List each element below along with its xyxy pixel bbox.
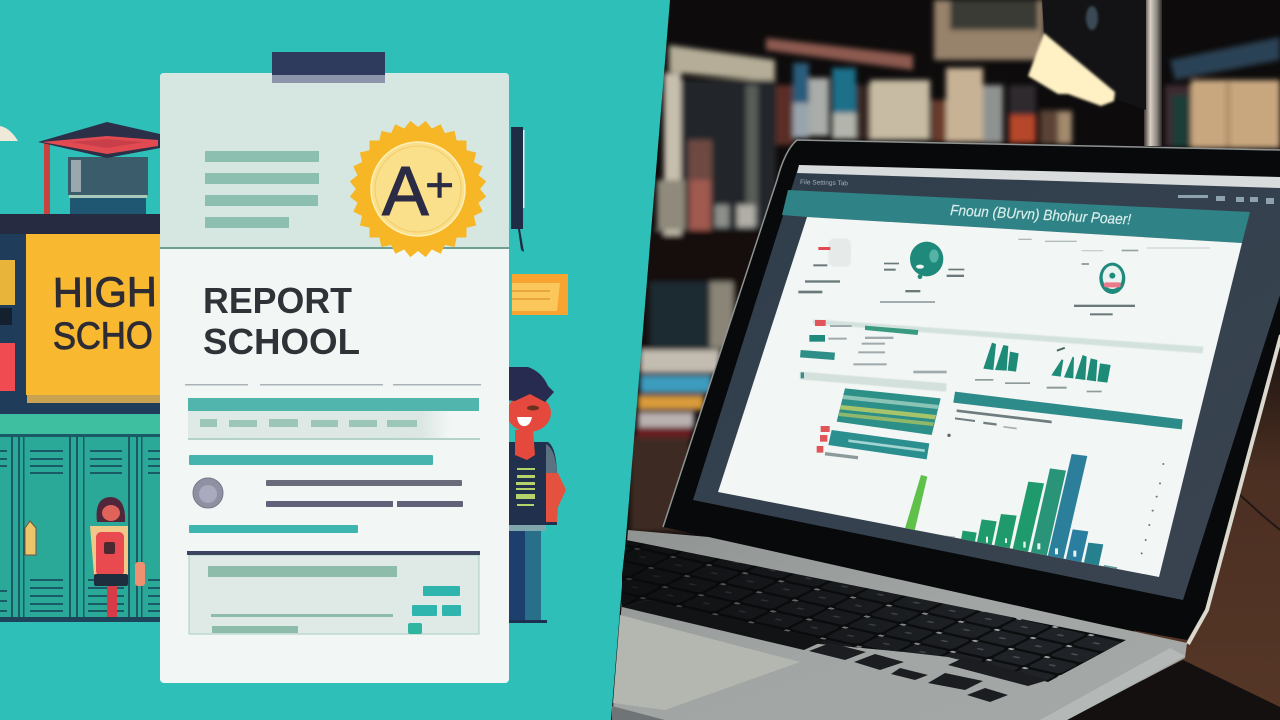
badge grade: A bbox=[382, 152, 429, 230]
report heading: SCHOOL bbox=[203, 321, 360, 362]
dashboard title: Fnoun (BUrvn) Bhohur Poaer! bbox=[950, 202, 1132, 229]
trousers bbox=[505, 531, 541, 621]
teal bar bbox=[189, 455, 433, 465]
trackpad bbox=[613, 615, 800, 710]
boy character behind report bbox=[505, 367, 566, 623]
blurred bookshelf books bbox=[630, 0, 1280, 532]
face bbox=[507, 394, 551, 432]
dashboard contents bbox=[798, 238, 1210, 572]
small bar chart two bbox=[1051, 355, 1111, 383]
badge rosette bbox=[350, 121, 486, 257]
header text lines bbox=[205, 151, 319, 228]
school building illustration bbox=[0, 122, 160, 622]
summary panel bbox=[187, 551, 480, 634]
small red poster bbox=[0, 343, 15, 391]
small yellow poster bbox=[0, 260, 15, 305]
green band bbox=[0, 414, 160, 434]
grey section strip bbox=[800, 372, 947, 392]
profile placeholder bbox=[818, 238, 851, 267]
yellow school sign bbox=[26, 234, 160, 403]
laptop lid bbox=[663, 140, 1280, 640]
locker tag bbox=[25, 521, 36, 555]
A+ badge: + bbox=[425, 157, 454, 213]
stripes bbox=[516, 468, 535, 506]
red markers bbox=[817, 426, 830, 453]
graduation cap bbox=[38, 122, 160, 214]
second mascot icon bbox=[1099, 263, 1125, 294]
clip bbox=[272, 52, 385, 83]
striped data table bbox=[837, 388, 941, 435]
cloud bbox=[0, 126, 18, 141]
A+ badge bbox=[350, 121, 486, 257]
report heading bbox=[203, 280, 360, 362]
legend chips and summary bars bbox=[800, 320, 947, 373]
chart axis dots bbox=[1141, 463, 1164, 554]
main bar chart bbox=[904, 454, 1117, 572]
header icons bbox=[1178, 195, 1274, 204]
wooden table bbox=[1060, 340, 1280, 720]
chart labels bbox=[975, 379, 1102, 392]
student with backpack bbox=[90, 497, 145, 617]
report card bbox=[160, 52, 509, 683]
dashboard screen bbox=[718, 217, 1242, 577]
card header bbox=[160, 73, 509, 248]
laptop bbox=[612, 140, 1280, 720]
small bar chart one bbox=[983, 343, 1065, 372]
subject table bbox=[188, 398, 480, 440]
sticky note bbox=[512, 274, 568, 315]
neck bbox=[515, 430, 535, 460]
main chart header bbox=[953, 392, 1183, 429]
teal callout block bbox=[828, 430, 929, 459]
lockers bbox=[0, 434, 160, 622]
grey divider band bbox=[813, 319, 1203, 353]
roof bbox=[0, 214, 160, 234]
teal background panel bbox=[0, 0, 670, 720]
building wall bbox=[0, 234, 160, 414]
lid edges bbox=[663, 140, 1280, 644]
green mascot icon bbox=[910, 242, 943, 279]
laptop base deck bbox=[612, 530, 1187, 720]
sign text: HIGH bbox=[53, 268, 157, 316]
screen bezel bbox=[693, 165, 1280, 600]
desk lamp bbox=[1028, 0, 1162, 146]
browser top bar bbox=[797, 165, 1280, 188]
browser toolbar text: File Settings Tab bbox=[800, 179, 848, 187]
dashboard header band bbox=[782, 190, 1250, 243]
pen clipped to report bbox=[511, 127, 524, 252]
main chart subtitle bbox=[955, 409, 1052, 429]
arm bbox=[546, 473, 566, 522]
card body bbox=[160, 73, 509, 683]
student avatar and details bbox=[193, 478, 463, 508]
teal bar bbox=[189, 525, 358, 533]
torso bbox=[505, 442, 557, 525]
small labels, top row bbox=[798, 239, 1210, 315]
fine print line bbox=[185, 384, 481, 386]
keyboard bbox=[622, 540, 1126, 702]
yellow school sign: SCHO OL bbox=[53, 313, 210, 357]
hair bbox=[505, 367, 554, 402]
keyboard bottom row keys bbox=[622, 600, 1048, 702]
photo background: bookshelf bbox=[600, 0, 1280, 720]
report heading: REPORT bbox=[203, 280, 352, 321]
